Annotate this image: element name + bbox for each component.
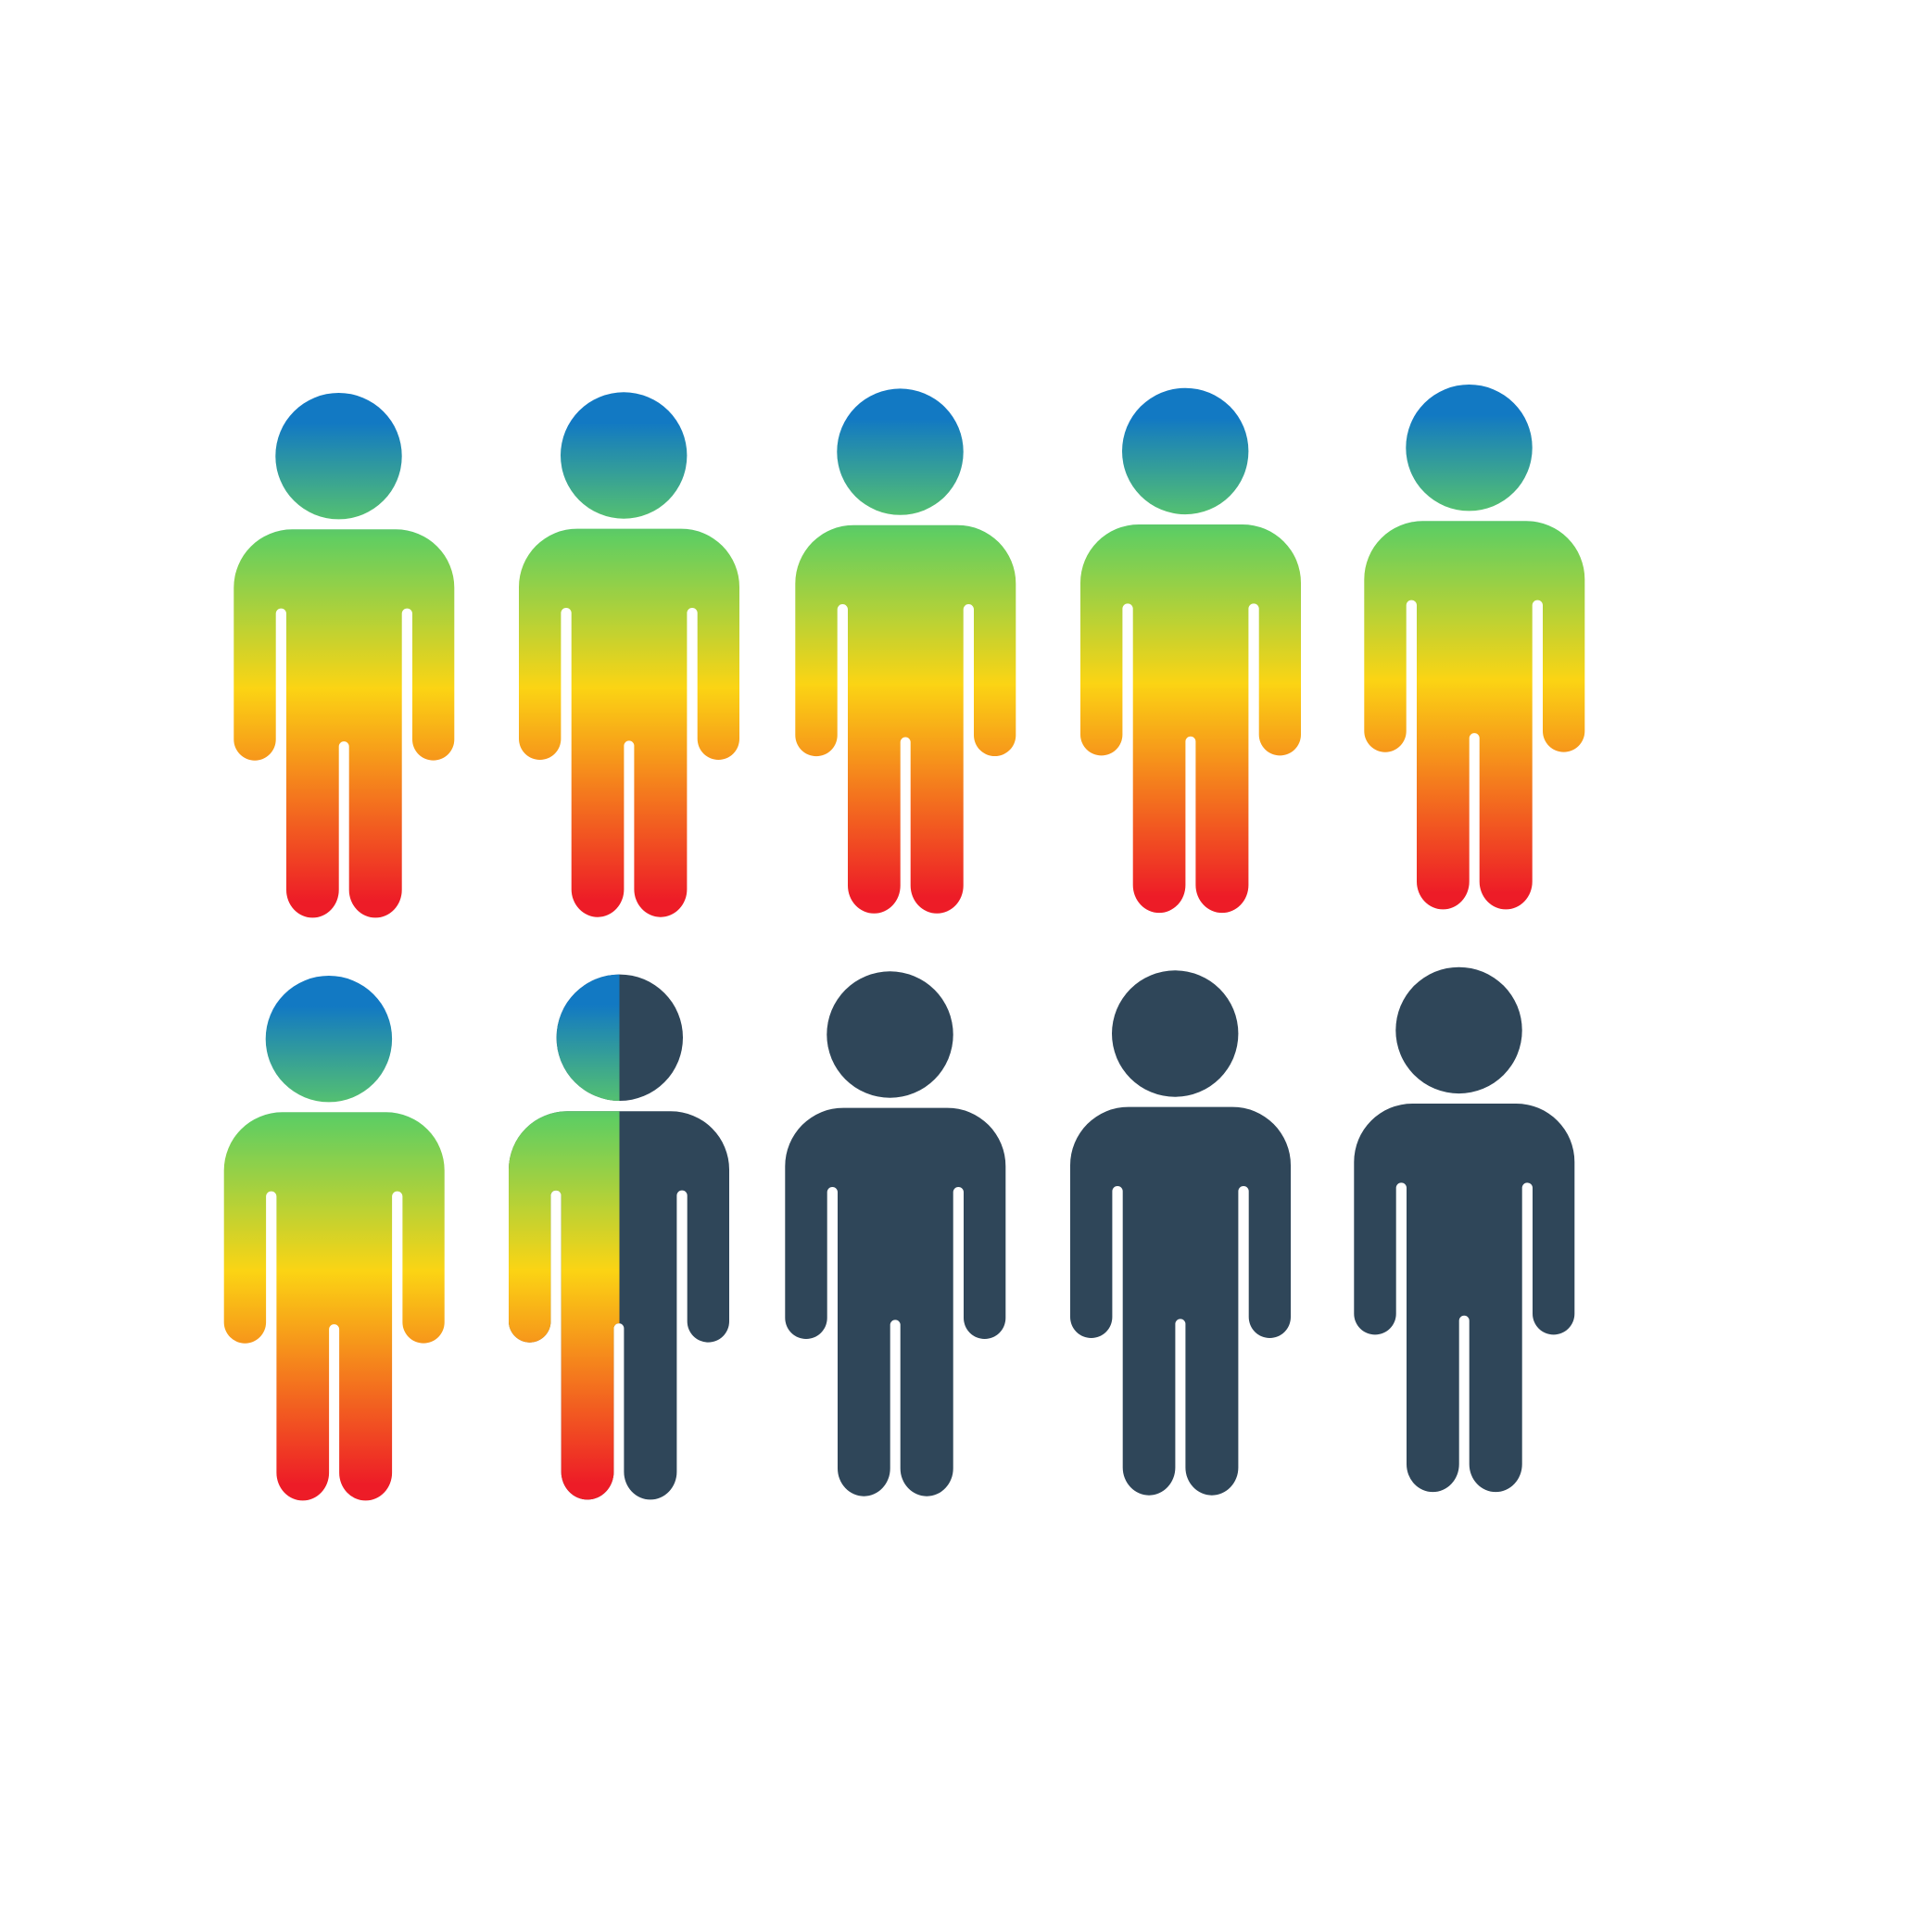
coloured left half [509, 975, 619, 1499]
person 2: coloured [519, 392, 739, 917]
body, dark base [509, 1111, 729, 1499]
person 7: half coloured, half dark [509, 975, 729, 1499]
body [519, 529, 739, 917]
body [1354, 1104, 1574, 1492]
person 6: coloured [224, 976, 445, 1500]
person 10: dark [1354, 967, 1574, 1492]
body [1070, 1107, 1291, 1496]
person 5: coloured [1364, 385, 1584, 909]
body [795, 525, 1016, 914]
body [224, 1112, 445, 1500]
body [1080, 524, 1301, 913]
head [1112, 970, 1238, 1097]
head, coloured half [556, 975, 619, 1101]
head [1395, 967, 1522, 1093]
person 9: dark [1070, 970, 1291, 1496]
body, coloured half [509, 1111, 619, 1499]
person 1: coloured [233, 393, 454, 917]
head, dark base [557, 975, 683, 1101]
body [785, 1108, 1005, 1496]
head [1122, 388, 1248, 514]
person 3: coloured [795, 388, 1016, 914]
body [233, 529, 454, 917]
person 8: dark [785, 971, 1005, 1496]
head [1406, 385, 1533, 511]
head [561, 392, 687, 519]
body [1364, 521, 1584, 909]
head [266, 976, 392, 1102]
head [827, 971, 953, 1098]
head [837, 388, 964, 515]
pictogram: ten people, 6.5 coloured and 3.5 dark [224, 385, 1584, 1501]
person 4: coloured [1080, 388, 1301, 913]
head [275, 393, 402, 519]
